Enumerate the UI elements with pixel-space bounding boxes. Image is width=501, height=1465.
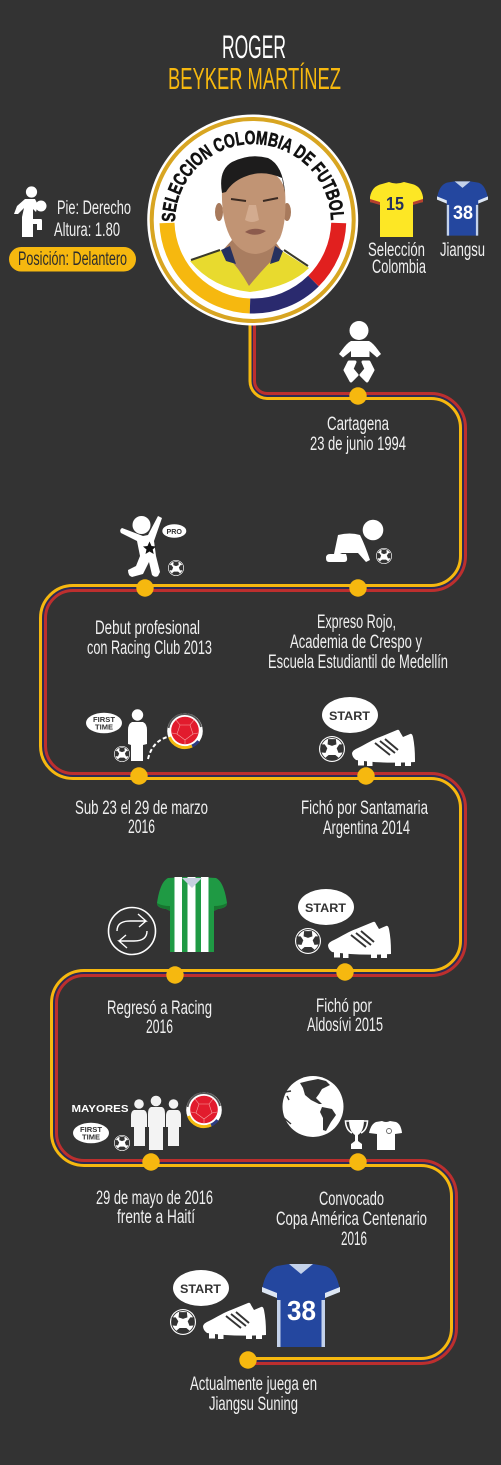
text: Expreso Rojo: Expreso Rojo, xyxy=(317,612,396,633)
icon: return arrows xyxy=(108,908,156,954)
text: Cartagena: Cartagena xyxy=(327,414,389,435)
text: Santamaria xyxy=(301,798,428,839)
text: Expreso Rojo xyxy=(268,612,448,673)
jersey labels xyxy=(368,240,485,278)
text: Santamaria: Argentina 2014 xyxy=(323,818,410,839)
timeline dots xyxy=(130,387,375,1369)
icon: player kicking ball xyxy=(14,186,46,237)
title: ROGER xyxy=(222,29,286,65)
icon: mayores debut: TIME xyxy=(82,1132,100,1142)
jersey: Colombia 15 xyxy=(370,182,423,237)
text: Sub 23: 2016 xyxy=(128,817,155,838)
jersey: large Jiangsu 38 xyxy=(262,1264,340,1347)
trophy xyxy=(346,1120,368,1149)
text: Aldosivi: Fichó por xyxy=(316,996,372,1017)
text: Haiti: 29 de mayo de 2016 xyxy=(96,1188,213,1209)
portrait badge xyxy=(147,114,358,326)
icon: start boot Jiangsu xyxy=(170,1270,266,1339)
icon: baby xyxy=(339,321,381,381)
text: Regresó a Racing: Regresó a Racing xyxy=(107,998,212,1019)
icon: start boot Aldosivi: START xyxy=(305,901,347,915)
jersey: Colombia 15: 15 xyxy=(386,194,404,214)
icon: mayores debut: FIRST xyxy=(80,1125,102,1134)
text: current club: Jiangsu Suning xyxy=(209,1394,298,1415)
icon: crawling child with ball xyxy=(326,520,392,564)
icon: pro debut player: PRO xyxy=(166,527,182,536)
text: Aldosivi: Aldosívi 2015 xyxy=(307,1015,383,1036)
text: current club xyxy=(190,1374,317,1415)
text: Sub 23 xyxy=(75,798,208,838)
timeline path xyxy=(40,325,466,1364)
text: Copa America: Copa América Centenario xyxy=(276,1209,427,1230)
jersey: Jiangsu 38 xyxy=(437,181,488,236)
player stats: Pie: Derecho xyxy=(57,198,131,219)
icon: globe, trophy and shirt xyxy=(282,1076,402,1150)
photo xyxy=(190,156,309,292)
title: BEYKER MARTÍNEZ xyxy=(168,61,341,96)
icon: first time under-23: FIRST xyxy=(93,715,115,724)
text: Haiti: frente a Haití xyxy=(117,1207,196,1228)
icon: start boot Santamaria: START xyxy=(329,709,371,723)
player stats: Altura: 1.80 xyxy=(54,220,120,241)
text: Regresó a Racing xyxy=(107,998,212,1038)
text: current club: Actualmente juega en xyxy=(190,1374,317,1395)
shirt xyxy=(369,1121,402,1150)
text: Copa America: Convocado xyxy=(319,1189,384,1210)
text: Cartagena xyxy=(310,414,406,455)
icon: start boot Jiangsu: START xyxy=(180,1282,222,1296)
text: Copa America xyxy=(276,1189,427,1250)
jersey labels: Selección xyxy=(368,240,425,261)
icon: mayores debut: MAYORES xyxy=(72,1103,128,1115)
icon: pro debut player xyxy=(120,516,186,577)
icon: first time under-23: TIME xyxy=(95,722,113,732)
text: Cartagena: 23 de junio 1994 xyxy=(310,434,406,455)
text: Aldosivi xyxy=(307,996,383,1036)
icon: mayores debut xyxy=(72,1092,222,1151)
jersey labels: Colombia xyxy=(372,257,426,278)
badge lettering: SELECCION COLOMBIA DE FUTBOL xyxy=(162,130,344,222)
position pill xyxy=(9,247,136,272)
jersey: large Jiangsu 38: 38 xyxy=(287,1295,316,1326)
icon: first time under-23 xyxy=(86,709,203,762)
text: Debut profesional xyxy=(87,618,212,659)
player stats xyxy=(54,198,131,241)
position pill: Posición: Delantero xyxy=(18,249,127,270)
text: Debut profesional: con Racing Club 2013 xyxy=(87,638,212,659)
text: Santamaria: Fichó por Santamaria xyxy=(301,798,428,819)
ring arcs xyxy=(167,223,339,306)
icon: start boot Aldosivi xyxy=(295,889,391,958)
text: Haiti xyxy=(96,1188,213,1228)
icon: start boot Santamaria xyxy=(319,697,415,766)
text: Sub 23: Sub 23 el 29 de marzo xyxy=(75,798,208,819)
text: Regresó a Racing: 2016 xyxy=(146,1017,173,1038)
text: Expreso Rojo: Academia de Crespo y xyxy=(290,632,422,653)
text: Copa America: 2016 xyxy=(341,1229,367,1250)
jersey: Jiangsu 38: 38 xyxy=(453,203,473,224)
icon: green striped jersey xyxy=(157,877,227,952)
text: Debut profesional: Debut profesional xyxy=(95,618,200,639)
title xyxy=(168,29,341,96)
